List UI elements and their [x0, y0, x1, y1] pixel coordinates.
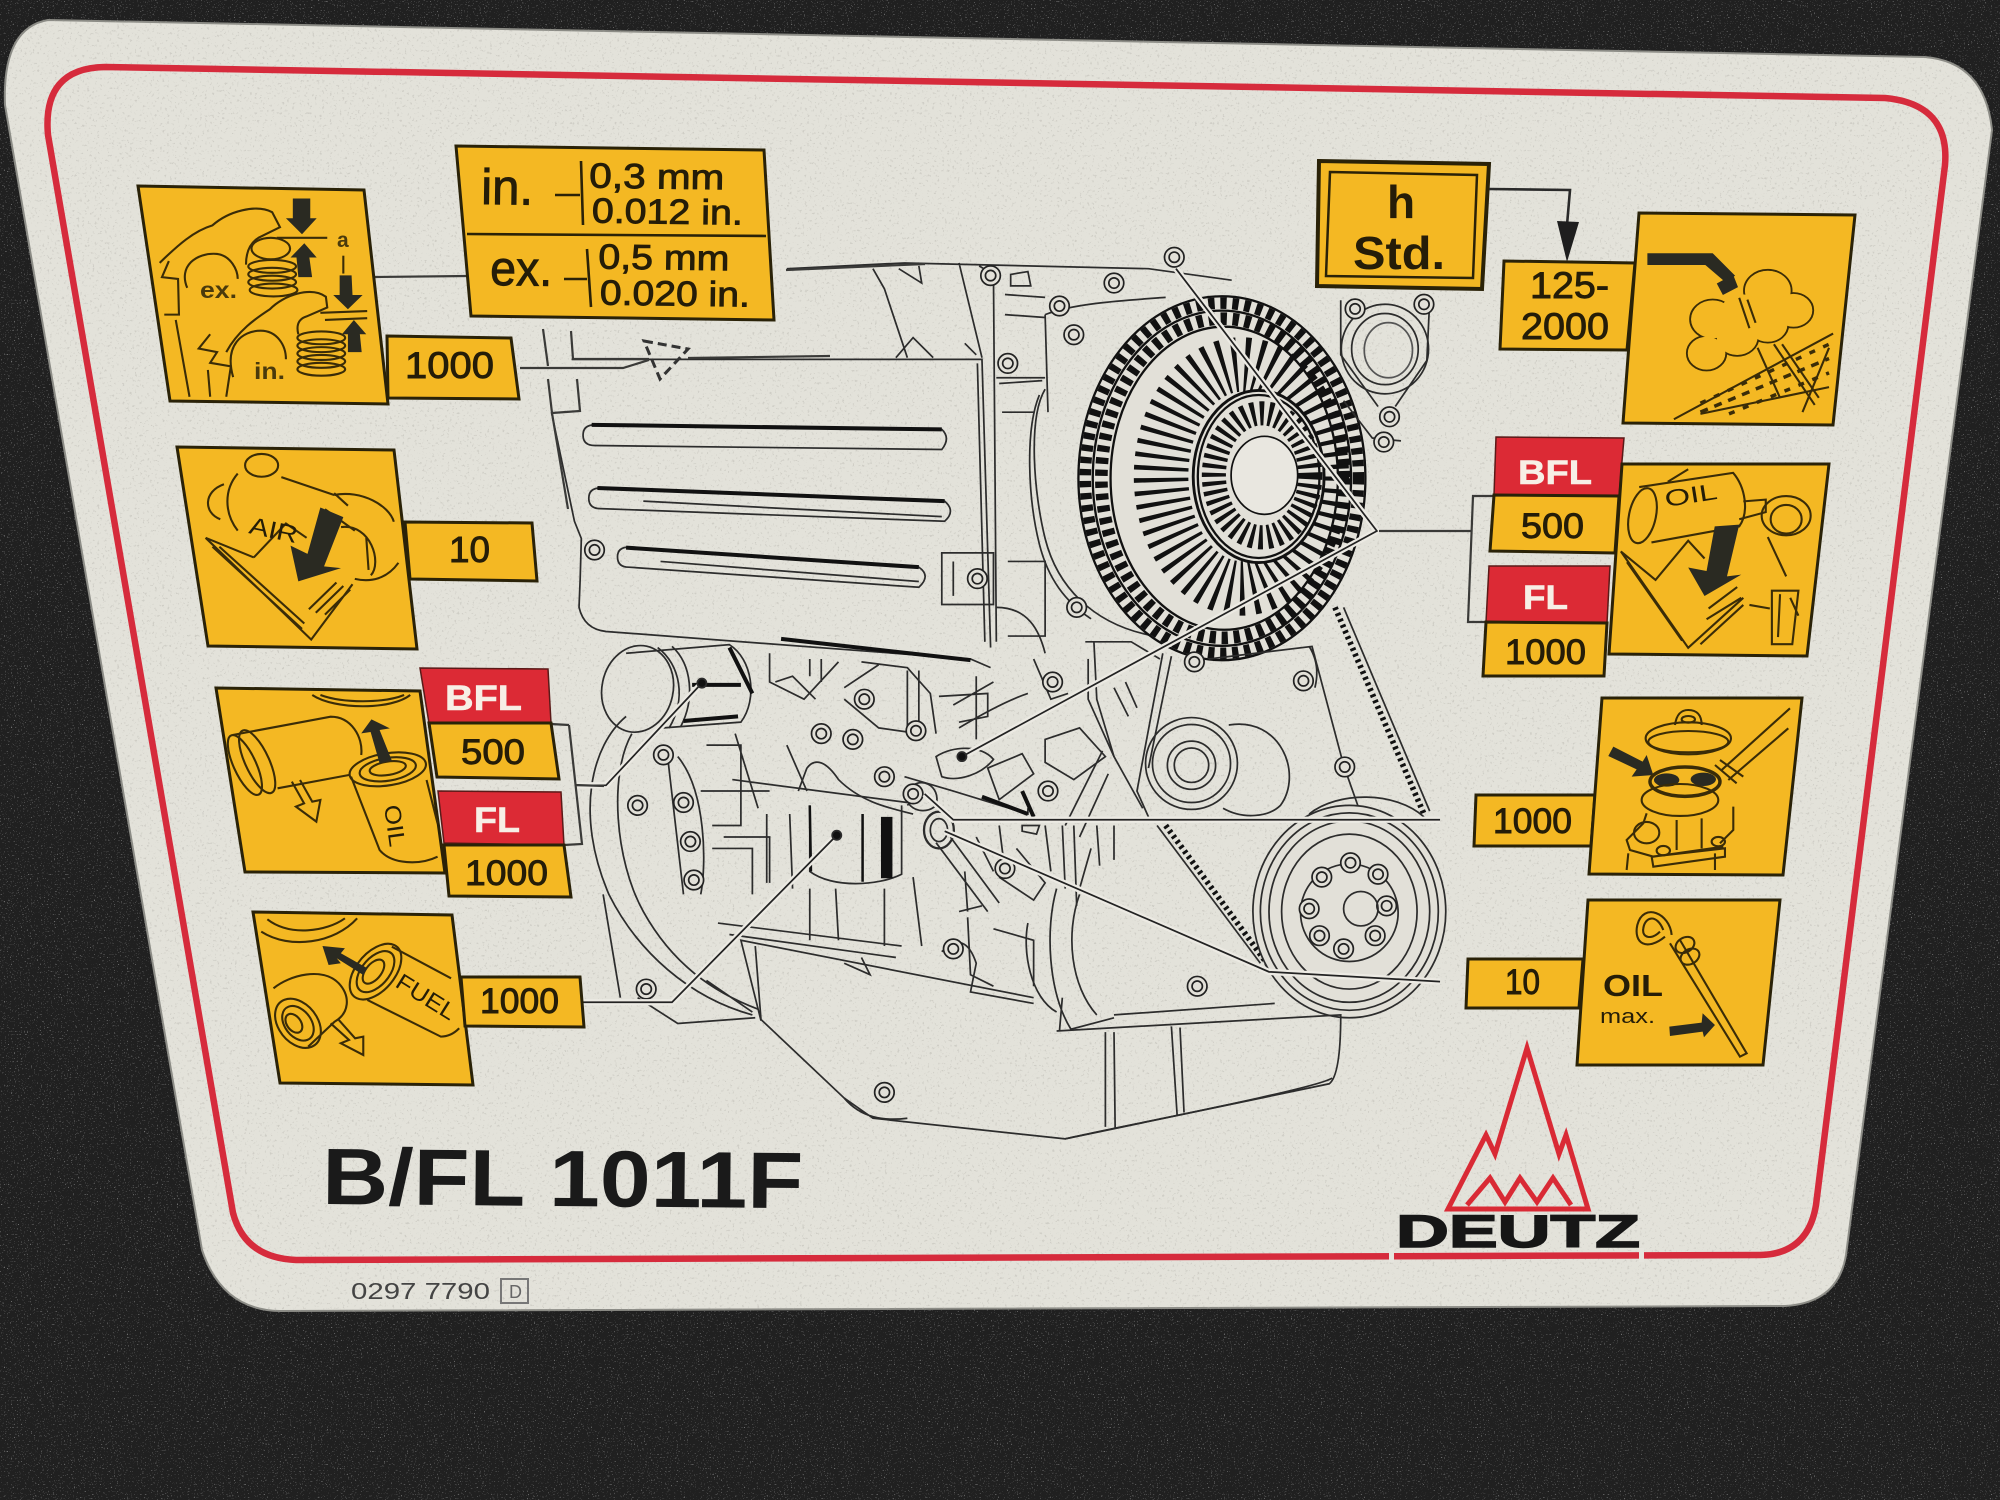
- red border frame: [47, 67, 1945, 1260]
- cooling fins cleaning interval box: 125-2000: [1500, 261, 1635, 350]
- title: engine model: B/FL 1011F: [322, 1132, 804, 1225]
- panel: fuel filter pictogram: [253, 912, 473, 1085]
- 500 value: 500: [1521, 507, 1584, 546]
- FL tag: [438, 791, 564, 845]
- icon: fuel filter replacement: [261, 918, 459, 1055]
- engine: fuel filter: [810, 805, 902, 884]
- fuel pre-filter interval box: 1000: [1474, 795, 1595, 846]
- engine: crankcase and oil pan: [590, 716, 1341, 1139]
- oil change interval: BFL 500 / FL 1000: [1483, 437, 1624, 676]
- FL tag: [1486, 566, 1610, 623]
- icon: air filter, manual and arrow: [206, 454, 398, 640]
- icon: oil filter replacement: [221, 695, 438, 862]
- legend box: h Std.: [1317, 161, 1489, 289]
- 1000 value: [1483, 622, 1607, 676]
- engine line drawing: [551, 247, 1446, 1139]
- FL tag: FL: [474, 801, 520, 840]
- label: OIL: OIL: [1603, 968, 1663, 1003]
- valve interval box: 1000: [387, 336, 519, 399]
- cooling fins cleaning interval box: 125-2000: 125-: [1530, 265, 1609, 306]
- oil level interval box: 10: 10: [1505, 963, 1540, 1002]
- panel: compressed air cleaning pictogram: [1623, 213, 1855, 425]
- fuel filter interval box: 1000: [461, 977, 584, 1027]
- connector lines and dashed valve-cover marker: [375, 264, 1494, 845]
- engine: cylinder head top: [787, 263, 1232, 653]
- engine: front flange: [1341, 295, 1434, 452]
- 500 value: [429, 723, 559, 779]
- label: a: a: [337, 229, 349, 252]
- 500 value: [1490, 495, 1619, 553]
- engine: belts and pulleys: [1085, 607, 1430, 966]
- 500 value: 500: [461, 733, 525, 772]
- label: FUEL: FUEL: [391, 968, 461, 1025]
- oil level interval box: 10: [1466, 959, 1583, 1008]
- 1000 value: 1000: [1505, 633, 1586, 672]
- panel: valve clearance pictogram: [138, 186, 388, 404]
- clearance ex.: 0,5 mm: [598, 238, 730, 278]
- FL tag: FL: [1523, 579, 1568, 617]
- clearance in.: in.: [481, 159, 534, 216]
- oil filter interval: BFL 500 / FL 1000: [420, 668, 571, 897]
- air filter interval box: 10: [405, 522, 537, 581]
- label: max.: max.: [1600, 1006, 1655, 1028]
- clearance ex.: 0.020 in.: [600, 274, 750, 315]
- logo: DEUTZ: [1389, 1048, 1644, 1262]
- leader lines over the engine: [577, 269, 1440, 1002]
- arrow: h Std. to service interval: [1489, 189, 1579, 262]
- label: AIR: AIR: [247, 512, 300, 549]
- fuel pre-filter interval box: 1000: 1000: [1493, 802, 1572, 841]
- 1000 value: 1000: [465, 854, 548, 893]
- clearance in.: [481, 155, 744, 233]
- panel: air filter pictogram: [177, 447, 417, 649]
- part number: 0297 7790: [351, 1278, 490, 1304]
- BFL tag: BFL: [1518, 454, 1592, 492]
- clearance ex.: [490, 236, 751, 315]
- part number: [351, 1278, 528, 1304]
- icon: oil drum, manual and drain arrow: [1621, 469, 1811, 648]
- clearance in.: 0.012 in.: [592, 192, 743, 233]
- BFL tag: [1494, 437, 1624, 496]
- engine: oil filter: [594, 639, 752, 739]
- engine: crankshaft pulley: [1253, 797, 1446, 1018]
- BFL tag: BFL: [445, 679, 522, 718]
- icon: cap, wrench and filter housing: [1608, 708, 1790, 870]
- label: OIL: OIL: [379, 803, 411, 849]
- valve interval box: 1000: 1000: [405, 345, 494, 386]
- engine: injection and pump details: [770, 653, 1143, 986]
- logo underline gaps: [1389, 1248, 1644, 1262]
- fuel filter interval box: 1000: 1000: [480, 982, 559, 1021]
- legend box: h Std.: h: [1387, 176, 1415, 228]
- engine: bolts: [585, 247, 1355, 1102]
- BFL tag: [420, 668, 551, 723]
- clearance in.: 0,3 mm: [589, 157, 725, 197]
- icon: rocker arms, springs and gap arrows: [160, 199, 367, 397]
- engine: rocker cover plate: [551, 359, 991, 668]
- engine: cooling fan: [1078, 296, 1365, 660]
- part number: D: [509, 1282, 522, 1302]
- panel: oil level pictogram: [1577, 900, 1780, 1065]
- air filter interval box: 10: 10: [449, 529, 490, 570]
- icon: dipstick: [1637, 912, 1747, 1057]
- legend box: h Std.: Std.: [1353, 227, 1445, 279]
- logo mountain mark: [1448, 1048, 1588, 1209]
- panel: cap removal pictogram: [1589, 698, 1802, 875]
- panel: valve clearance values: [456, 146, 774, 320]
- label: in.: in.: [254, 358, 285, 384]
- cooling fins cleaning interval box: 125-2000: 2000: [1521, 306, 1609, 347]
- panel: oil change pictogram: [1609, 464, 1829, 656]
- panel: oil filter pictogram: [216, 688, 445, 873]
- 1000 value: [444, 845, 571, 897]
- clearance ex.: ex.: [490, 242, 553, 297]
- logo wordmark: DEUTZ: [1396, 1206, 1640, 1257]
- label: ex.: ex.: [200, 277, 237, 303]
- icon: air nozzle, dust cloud and fins: [1647, 253, 1833, 419]
- label: OIL: OIL: [1663, 478, 1719, 512]
